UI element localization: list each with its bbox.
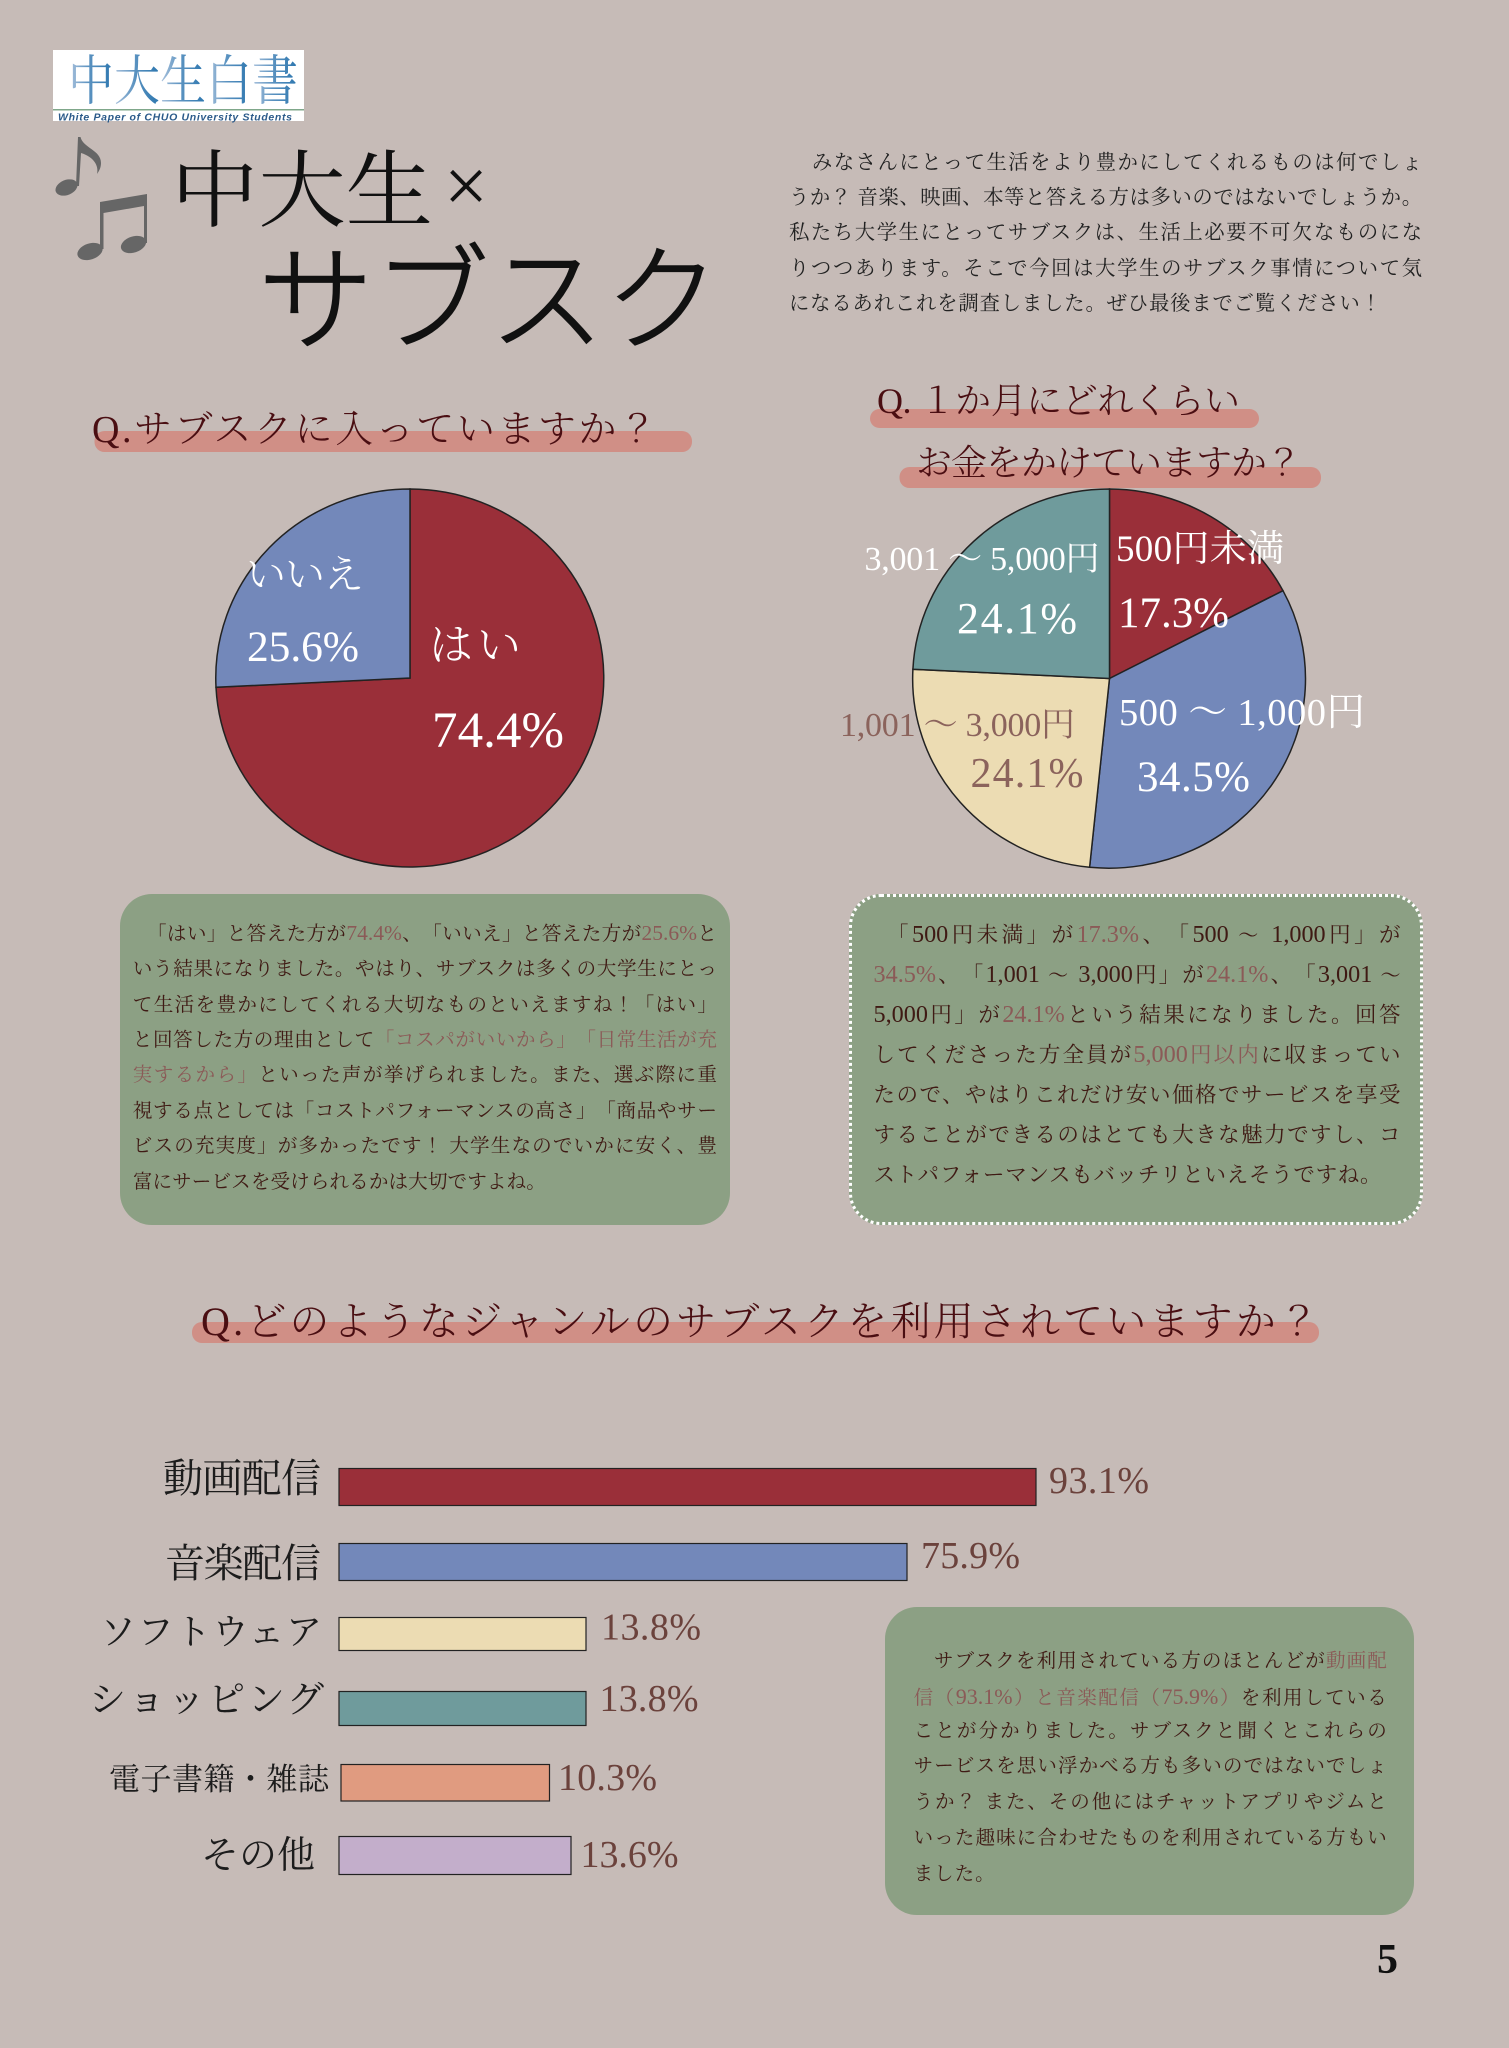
text block: genre commentary: 信（93.1%）と音楽配信（75.9%）を利用している: [914, 1684, 1387, 1708]
text: になるあれこれを調査しました。ぜひ最後までご覧ください！: [789, 293, 1381, 315]
label: いいえ: いいえ: [246, 552, 364, 597]
heading: Q1: Q.サブスクに入っていますか？: [92, 409, 657, 451]
bar row: 電子書籍・雑誌: 10.3%: [558, 1757, 657, 1799]
bar row: ソフトウェア: ソフトウェア: [100, 1612, 322, 1652]
text block: yes/no commentary: 富にサービスを受けられるかは大切ですよね。: [133, 1172, 546, 1193]
text: うか？ 音楽、映画、本等と答える方は多いのではないでしょうか。: [789, 187, 1422, 209]
heading: Q2 line 1: Q. １か月にどれくらい: [877, 381, 1240, 421]
text block: yes/no commentary: 視する点としては「コストパフォーマンスの高さ」「商品やサー: [133, 1100, 717, 1122]
pie chart: monthly spend: [840, 489, 1365, 868]
label: 3,001~5,000円: 3,001 ～ 5,000円: [864, 541, 1100, 578]
title: 中大生×: 中大生: [171, 146, 433, 239]
text block: monthly spend commentary: 34.5%、「1,001 ～ 3,000円」が24.1%、「3,001 ～: [874, 961, 1401, 988]
logo: 中大生白書: [53, 50, 304, 124]
bar row: ショッピング: [89, 1678, 698, 1726]
text block: monthly spend commentary: ストパフォーマンスもバッチリといえそうですね。: [874, 1163, 1382, 1187]
pie chart: subscribed or not: [216, 489, 604, 867]
bar row: 音楽配信: 75.9%: [921, 1535, 1020, 1577]
text block: genre commentary: サービスを思い浮かべる方も多いのではないでしょ: [914, 1756, 1387, 1777]
text block: yes/no commentary: ビスの充実度」が多かったです！ 大学生なのでいかに安く、豊: [133, 1136, 717, 1157]
value: 24.1% teal: 24.1%: [957, 594, 1077, 643]
text block: monthly spend commentary: 5,000円」が24.1%という結果になりました。回答: [874, 1001, 1400, 1028]
page number: 5: [1377, 1937, 1398, 1983]
logo: 中大生白書: 中大生白書: [68, 52, 298, 112]
value: 74.4%: 74.4%: [432, 703, 564, 759]
icon: beamed music notes: [75, 194, 148, 263]
slice: はい 74.4%: [216, 489, 604, 867]
bar row: その他: その他: [201, 1835, 315, 1877]
label: 1,001~3,000円: 1,001 ～ 3,000円: [840, 707, 1075, 744]
label: 500円未満: 500円未満: [1116, 528, 1284, 570]
panel: genre commentary: [885, 1607, 1414, 1915]
text block: yes/no commentary: 「はい」と答えた方が74.4%、「いいえ」と答えた方が25.6%と: [147, 921, 717, 945]
text block: monthly spend commentary: してくださった方全員が5,000円以内に収まってい: [874, 1041, 1400, 1068]
text block: monthly spend commentary: 「500円未満」が17.3%、「500 ～ 1,000円」が: [887, 921, 1401, 948]
text: みなさんにとって生活をより豊かにしてくれるものは何でしょ: [812, 152, 1422, 174]
bar row: 音楽配信: [165, 1535, 1020, 1586]
text block: genre commentary: うか？ また、その他にはチャットアプリやジムと: [914, 1792, 1387, 1813]
bar row: ショッピング: ショッピング: [89, 1680, 324, 1721]
text block: genre commentary: サブスクを利用されている方のほとんどが動画配: [934, 1650, 1387, 1672]
slice: 1001-3000 yen: [913, 669, 1110, 867]
label: 500~1,000円: 500 ～ 1,000円: [1119, 692, 1365, 734]
bar chart: genres: [89, 1456, 1149, 1877]
icon: music note: [53, 137, 101, 199]
title: 中大生×: ×: [444, 142, 488, 229]
bar row: 動画配信: [163, 1456, 1149, 1506]
text block: yes/no commentary: 実するから」といった声が挙げられました。また、選ぶ際に重: [133, 1065, 717, 1086]
text block: genre commentary: [914, 1650, 1387, 1885]
heading: Q3: Q.どのようなジャンルのサブスクを利用されていますか？: [201, 1299, 1319, 1344]
text block: yes/no commentary: いう結果になりました。やはり、サブスクは多くの大学生にとっ: [133, 959, 717, 980]
bar row: ソフトウェア: [100, 1606, 701, 1652]
text block: yes/no commentary: [133, 921, 717, 1193]
text block: monthly spend commentary: [874, 921, 1401, 1187]
text block: monthly spend commentary: たので、やはりこれだけ安い価格でサービスを享受: [874, 1083, 1400, 1107]
logo: 中大生白書: White Paper of CHUO University Students: [58, 112, 292, 124]
value: 24.1% cream: 24.1%: [970, 751, 1084, 797]
bar row: 音楽配信: 音楽配信: [165, 1541, 321, 1586]
bar row: その他: 13.6%: [580, 1834, 678, 1876]
slice: under 500 yen: [1110, 489, 1283, 678]
value: 25.6%: 25.6%: [247, 623, 359, 671]
bar row: ショッピング: 13.8%: [600, 1678, 698, 1720]
text block: genre commentary: ました。: [914, 1864, 996, 1885]
heading: Q2 line 2: お金をかけていますか？: [916, 443, 1302, 483]
bar row: その他: [201, 1834, 678, 1877]
bar row: 動画配信: 93.1%: [1049, 1460, 1149, 1502]
text block: monthly spend commentary: することができるのはとても大きな魅力ですし、コ: [874, 1123, 1400, 1147]
slice: 3001-5000 yen: [913, 489, 1110, 678]
title: サブスク: サブスク: [258, 236, 720, 366]
text block: genre commentary: いった趣味に合わせたものを利用されている方もい: [914, 1828, 1387, 1849]
bar row: 動画配信: 動画配信: [163, 1456, 321, 1501]
intro text block: [789, 152, 1422, 315]
slice: いいえ 25.6%: [216, 489, 410, 687]
panel: yes/no commentary: [120, 894, 730, 1225]
text block: genre commentary: ことが分かりました。サブスクと聞くとこれらの: [914, 1720, 1387, 1742]
text block: yes/no commentary: と回答した方の理由として「コスパがいいから」「日常生活が充: [133, 1030, 717, 1050]
bar row: 電子書籍・雑誌: [109, 1757, 657, 1801]
text: りつつあります。そこで今回は大学生のサブスク事情について気: [789, 258, 1422, 280]
value: 17.3%: 17.3%: [1118, 590, 1229, 637]
panel: monthly spend commentary: [849, 894, 1423, 1225]
slice: 500-1000 yen: [1090, 591, 1306, 868]
bar row: 電子書籍・雑誌: 電子書籍・雑誌: [109, 1762, 331, 1797]
text block: yes/no commentary: て生活を豊かにしてくれる大切なものといえますね！「はい」: [133, 994, 717, 1016]
label: はい: はい: [429, 621, 521, 670]
bar row: ソフトウェア: 13.8%: [601, 1606, 701, 1648]
text: 私たち大学生にとってサブスクは、生活上必要不可欠なものにな: [789, 222, 1422, 244]
value: 34.5%: 34.5%: [1137, 754, 1250, 801]
